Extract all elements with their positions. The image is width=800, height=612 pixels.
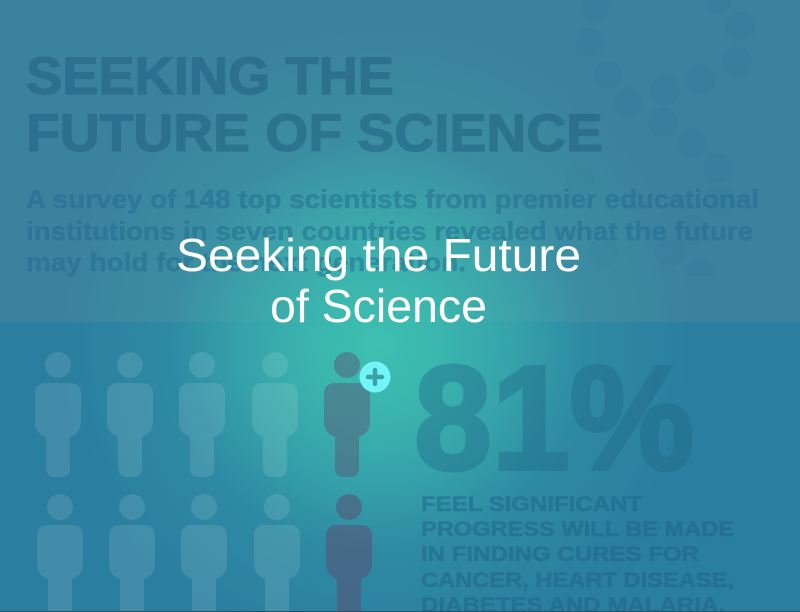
- background: top panel: [0, 0, 800, 322]
- statistic: 81 percent: 81%: [414, 336, 694, 501]
- text block: survey intro: [26, 184, 759, 277]
- heading: infographic title: FUTURE OF SCIENCE: [26, 104, 603, 163]
- heading: overlay title: Seeking the Future: [176, 229, 581, 281]
- background: bottom panel: [0, 322, 800, 612]
- people row 2: [37, 494, 372, 612]
- bottom edge line: [0, 611, 800, 612]
- heading: overlay title: [176, 229, 581, 332]
- heading: overlay title: of Science: [270, 280, 487, 332]
- text block: statistic description: [421, 493, 734, 612]
- text block: statistic description: CANCER, HEART DISEASE,: [421, 569, 734, 592]
- text block: statistic description: PROGRESS WILL BE MADE: [421, 518, 734, 541]
- icon: DNA helix dots: [565, 0, 755, 276]
- icon: plus badge: [360, 362, 390, 392]
- text block: statistic description: FEEL SIGNIFICANT: [421, 493, 642, 516]
- text block: statistic description: IN FINDING CURES FOR: [421, 543, 699, 566]
- text block: survey intro: may hold for the next generation.: [26, 247, 466, 277]
- heading: infographic title: SEEKING THE: [26, 47, 394, 106]
- heading: infographic title: [26, 47, 603, 163]
- chart: people pictogram: [35, 352, 372, 612]
- people row 1: [35, 352, 370, 477]
- text block: survey intro: A survey of 148 top scientists from premier educational: [26, 184, 759, 214]
- text block: survey intro: institutions in seven countries revealed what the future: [26, 216, 753, 246]
